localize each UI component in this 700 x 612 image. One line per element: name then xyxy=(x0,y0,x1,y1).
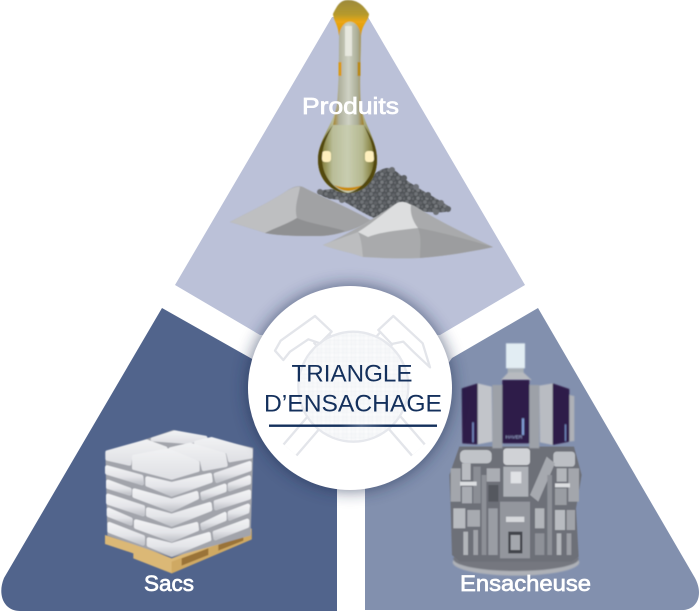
sack stack xyxy=(106,431,253,557)
right hammer head xyxy=(378,316,430,367)
central circle xyxy=(248,286,452,490)
right powder pile xyxy=(323,202,493,258)
label: Sacs: Sacs xyxy=(144,571,194,596)
title underline xyxy=(269,424,437,427)
panel: Ensacheuse xyxy=(365,308,699,610)
left hammer head xyxy=(275,316,332,360)
gravel heap xyxy=(317,167,451,218)
machine base xyxy=(453,547,579,576)
circle drop shadow xyxy=(247,285,453,491)
illustration: product piles and oil drop xyxy=(230,0,493,258)
pallet xyxy=(105,528,252,573)
illustration: pallet of sacks xyxy=(105,431,253,573)
label: Produits: Produits xyxy=(302,93,399,119)
panel: Sacs xyxy=(1,308,337,611)
title line 1: TRIANGLE xyxy=(292,360,412,388)
oil drop xyxy=(318,0,377,193)
hammer handles xyxy=(290,330,418,450)
label: Ensacheuse: Ensacheuse xyxy=(460,571,591,596)
logo watermark: crossed hammers xyxy=(275,316,430,450)
panel: Produits xyxy=(175,17,525,335)
control cabinets: HAVER xyxy=(506,434,523,440)
grid disc xyxy=(298,332,408,442)
title line 2: D’ENSACHAGE xyxy=(264,390,442,418)
title xyxy=(264,360,442,418)
top hopper xyxy=(501,343,532,380)
control cabinets xyxy=(462,380,574,448)
left powder pile xyxy=(230,186,372,236)
lower mechanics xyxy=(449,447,582,562)
illustration: bagging machine xyxy=(449,343,582,576)
